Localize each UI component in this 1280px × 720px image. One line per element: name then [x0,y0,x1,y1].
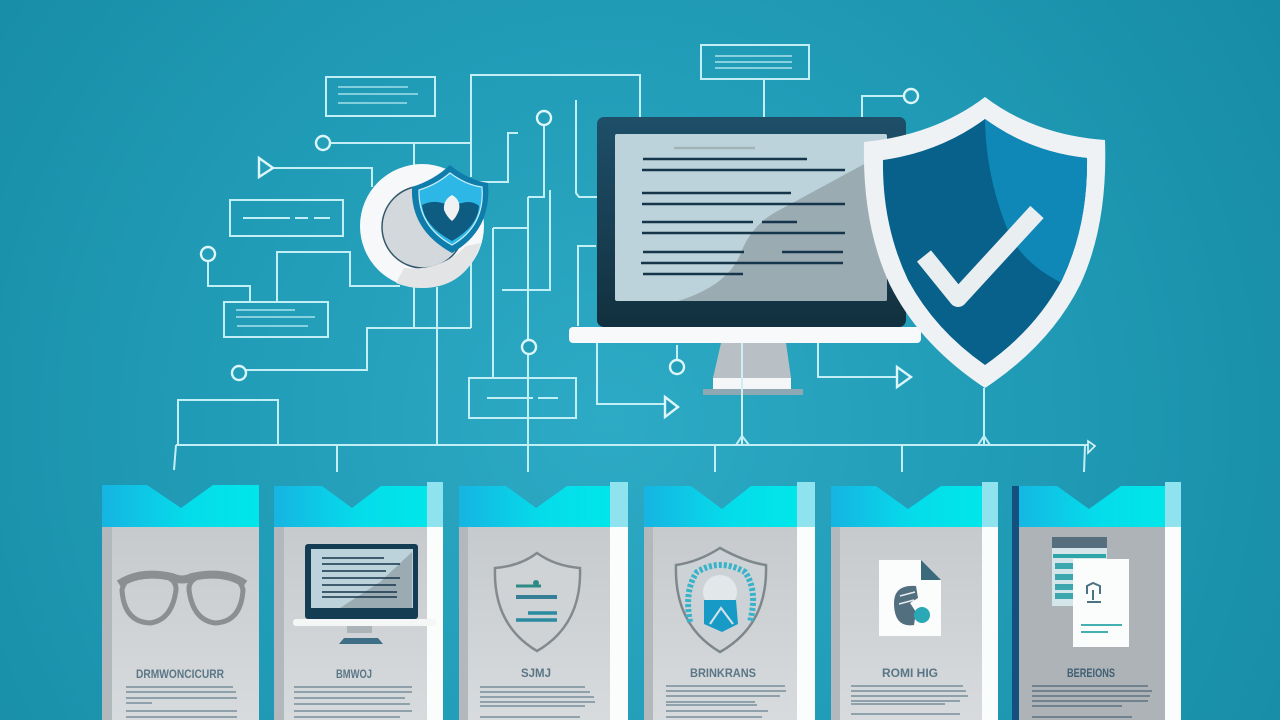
monitor bezel bar [569,327,921,343]
card title: DRMWONCICURR [136,667,224,681]
icon: shield outline [495,553,580,651]
info box: left middle [230,200,343,236]
check mark [924,212,1037,298]
panel: card 3 [459,482,628,720]
card body text [126,687,237,717]
monitor [569,117,921,445]
screen text lines [641,148,845,274]
monitor stand [713,343,791,378]
panel: card 2 [274,482,443,720]
icon: small shield [412,165,488,253]
info box: lower left [224,302,328,337]
card body text [666,686,786,717]
icon: glasses [119,574,245,623]
card body text [1032,686,1152,717]
circuit diagram connectors [174,75,1088,472]
card body text [851,686,968,714]
icon: stacked documents [1052,537,1129,647]
monitor screen [615,134,890,301]
panel: card 1 [102,485,259,720]
info box: top centre [701,45,809,79]
info box: lower centre [469,378,576,418]
icon: document [879,560,941,636]
card title: BRINKRANS [690,666,756,680]
large shield with check mark [864,97,1105,388]
icon: small monitor [293,544,436,644]
icon: emblem shield [676,548,766,652]
info box: top left [326,77,435,116]
card title: BMWOJ [336,667,372,681]
panel: card 4 [644,482,815,720]
card title: SJMJ [521,666,551,680]
monitor body [597,117,906,327]
panel: card 5 [831,482,998,720]
small badge with shield [360,164,488,288]
connector nodes [201,89,1095,453]
card body text [294,687,412,717]
stand line [741,343,743,445]
card body text [480,687,595,717]
card title: BEREIONS [1067,666,1115,680]
card title: ROMI HIG [882,666,938,680]
panel: card 6 [1012,482,1181,720]
